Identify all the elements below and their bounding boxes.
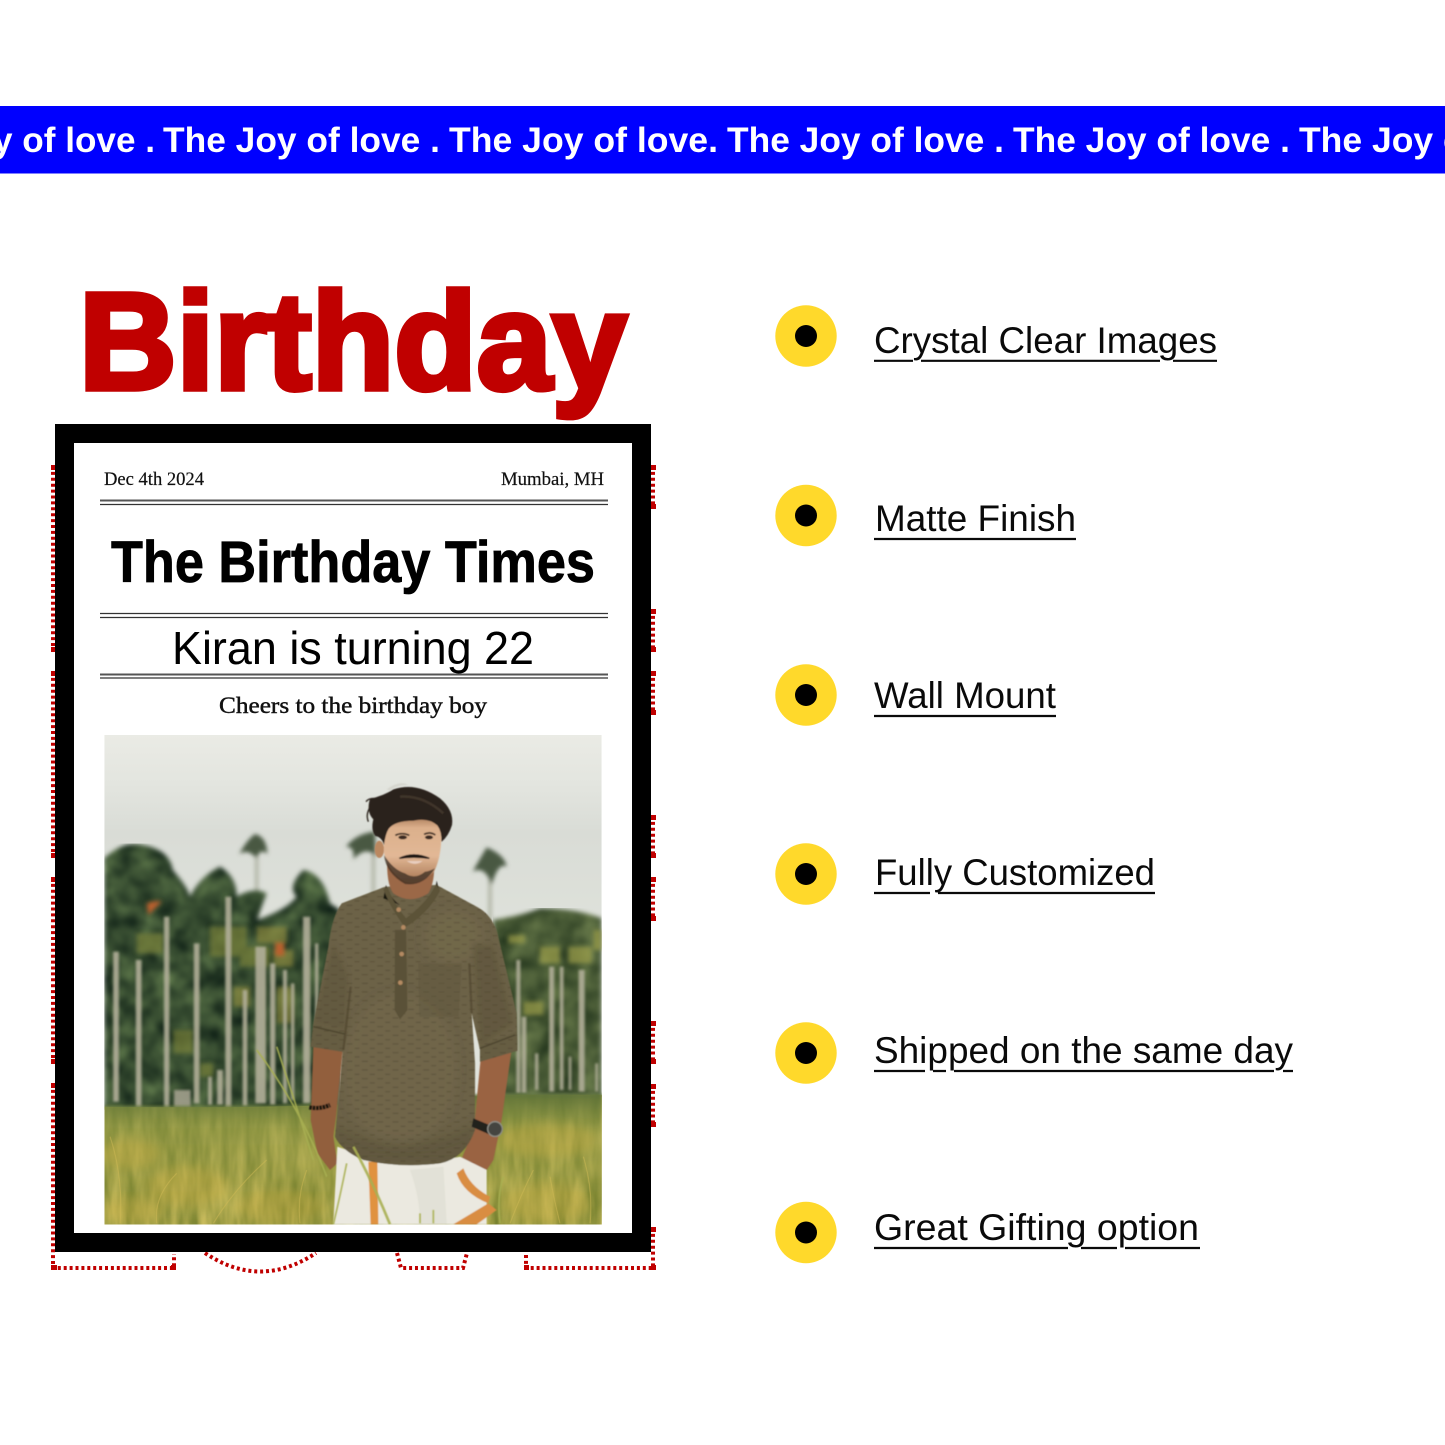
beard and features (384, 855, 435, 884)
subheadline: Cheers to the birthday boy (219, 693, 488, 718)
feature: Great Gifting option (775, 1202, 1200, 1263)
shirt (311, 885, 517, 1165)
feature: Matte Finish: Matte Finish (875, 498, 1076, 539)
marquee banner: The Joy of love. (449, 120, 718, 160)
marquee banner: The Joy of love . (727, 120, 1004, 160)
man (307, 783, 520, 1224)
feature: Shipped on the same day: Shipped on the same day (874, 1030, 1293, 1071)
hair (369, 787, 452, 845)
features list (775, 305, 1293, 1263)
newspaper title: The Birthday Times (111, 530, 595, 595)
foreground grass blades (257, 1047, 503, 1224)
feature: Wall Mount: Wall Mount (874, 675, 1057, 716)
feature: Matte Finish (775, 485, 1076, 546)
feature: Great Gifting option: Great Gifting option (874, 1207, 1199, 1248)
bracelet and watch (309, 1105, 330, 1108)
feature: Crystal Clear Images: Crystal Clear Images (874, 320, 1217, 361)
heading: Birthday: Birthday (79, 265, 627, 419)
collar (383, 884, 440, 927)
feature: Fully Customized: Fully Customized (875, 852, 1155, 893)
headline: Kiran is turning 22 (172, 622, 534, 674)
tall background palms (239, 832, 507, 927)
photo: man standing in a grass field with palm trees (100, 735, 602, 1224)
tree line right (493, 908, 602, 1097)
marquee banner (0, 106, 1445, 174)
coloured leaf patches (137, 901, 602, 1077)
poster location: Mumbai, MH (501, 469, 604, 490)
dhoti (333, 1147, 487, 1224)
palm trunks (116, 897, 597, 1112)
feature: Fully Customized (775, 843, 1155, 905)
marquee banner: The Joy of love . (163, 120, 440, 160)
marquee banner: The Joy of love . (1013, 120, 1290, 160)
buttons (396, 907, 401, 912)
arms (311, 1045, 343, 1170)
dotted red cut-line frame (51, 465, 656, 1272)
neck (387, 857, 434, 899)
poster date: Dec 4th 2024 (104, 469, 204, 490)
grass field (104, 1095, 602, 1224)
face (375, 841, 384, 858)
feature: Shipped on the same day (775, 1022, 1293, 1084)
poster frame (55, 424, 651, 1252)
feature: Wall Mount (775, 664, 1057, 726)
feature: Crystal Clear Images (775, 305, 1217, 367)
tree line left (104, 844, 340, 1110)
